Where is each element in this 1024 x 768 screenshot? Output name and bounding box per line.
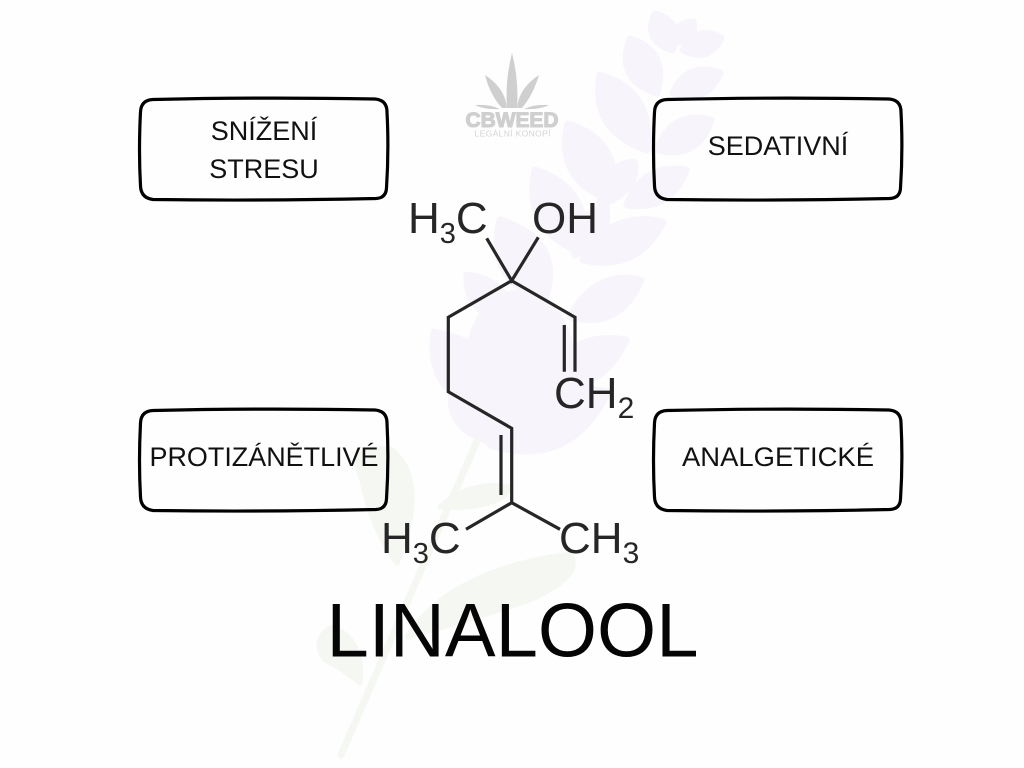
atom label: H3C top: H <box>408 194 440 243</box>
box: sedativní <box>654 98 902 200</box>
logo wordmark: CBWEED <box>466 109 558 132</box>
atom label: OH: OH <box>532 194 598 243</box>
box label: PROTIZÁNĚTLIVÉ <box>150 441 378 472</box>
logo icon: cannabis leaf <box>475 53 549 109</box>
chemical structure: linalool <box>381 194 639 570</box>
atom label: CH2: 2 <box>618 392 634 425</box>
atom label: CH2: CH <box>554 369 618 418</box>
atom label: H3C bottom: C <box>429 514 461 563</box>
molecule bonds <box>448 237 575 529</box>
atom label: H3C top: C <box>456 194 488 243</box>
title: LINALOOL <box>326 588 698 674</box>
atom label: CH3: CH <box>559 514 623 563</box>
box label: ANALGETICKÉ <box>682 442 874 472</box>
atom label: H3C bottom: H <box>381 514 413 563</box>
logo: CBWEED <box>466 53 558 138</box>
atom label: H3C bottom: 3 <box>413 538 429 570</box>
atom label: H3C top: 3 <box>440 218 456 250</box>
box: snížení stresu <box>140 98 388 200</box>
box label: STRESU <box>209 154 319 184</box>
box: protizánětlivé <box>140 409 388 511</box>
atom label: CH3: 3 <box>623 537 639 570</box>
box: analgetické <box>654 409 902 511</box>
background illustration: green sprig <box>319 441 573 755</box>
box label: SNÍŽENÍ <box>211 115 318 146</box>
box label: SEDATIVNÍ <box>708 131 849 161</box>
logo tagline: LEGÁLNÍ KONOPÍ <box>474 128 551 138</box>
background illustration: lavender sprig <box>433 14 721 451</box>
